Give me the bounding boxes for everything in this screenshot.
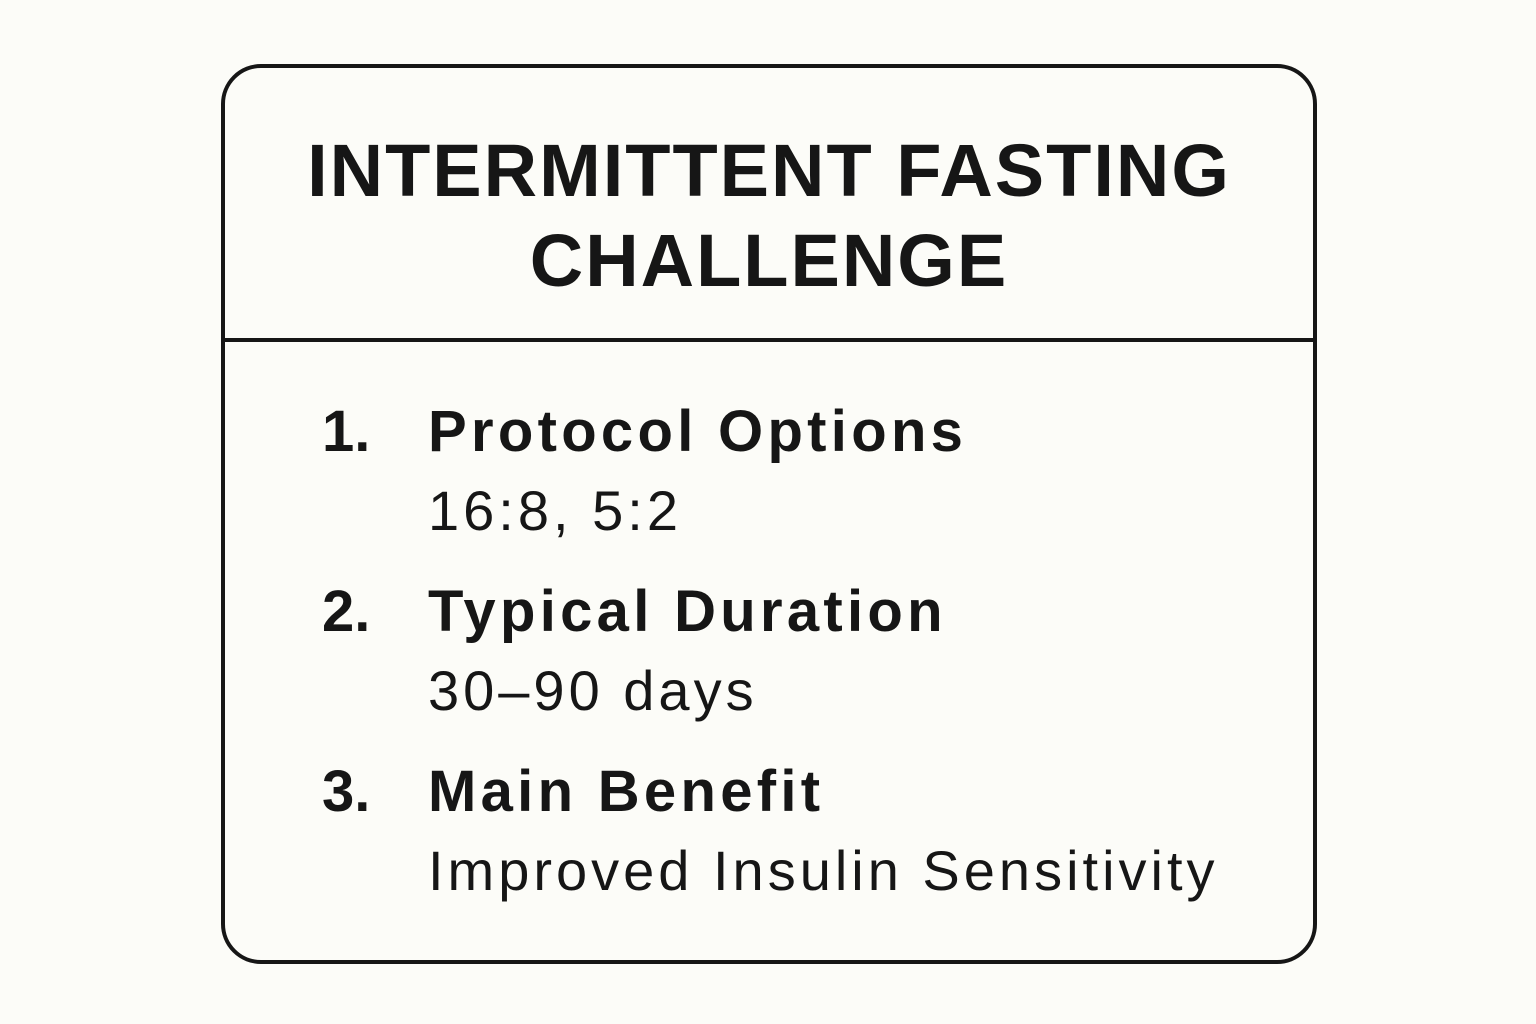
number 3: 3. [322,759,370,824]
text: duration: 30–90 days [428,659,758,722]
item 1 [322,399,967,542]
item 2 [322,579,947,722]
heading: typical duration: Typical Duration [428,579,947,644]
title: CHALLENGE [530,219,1008,302]
text: benefit: Improved Insulin Sensitivity [428,839,1219,902]
panel: card [221,64,1317,964]
heading: main benefit: Main Benefit [428,759,824,824]
title [307,129,1231,302]
text: protocols: 16:8, 5:2 [428,479,682,542]
title: INTERMITTENT FASTING [307,129,1231,212]
number 2: 2. [322,579,370,644]
heading: protocol options: Protocol Options [428,399,967,464]
item 3 [322,759,1219,902]
number 1: 1. [322,399,370,464]
